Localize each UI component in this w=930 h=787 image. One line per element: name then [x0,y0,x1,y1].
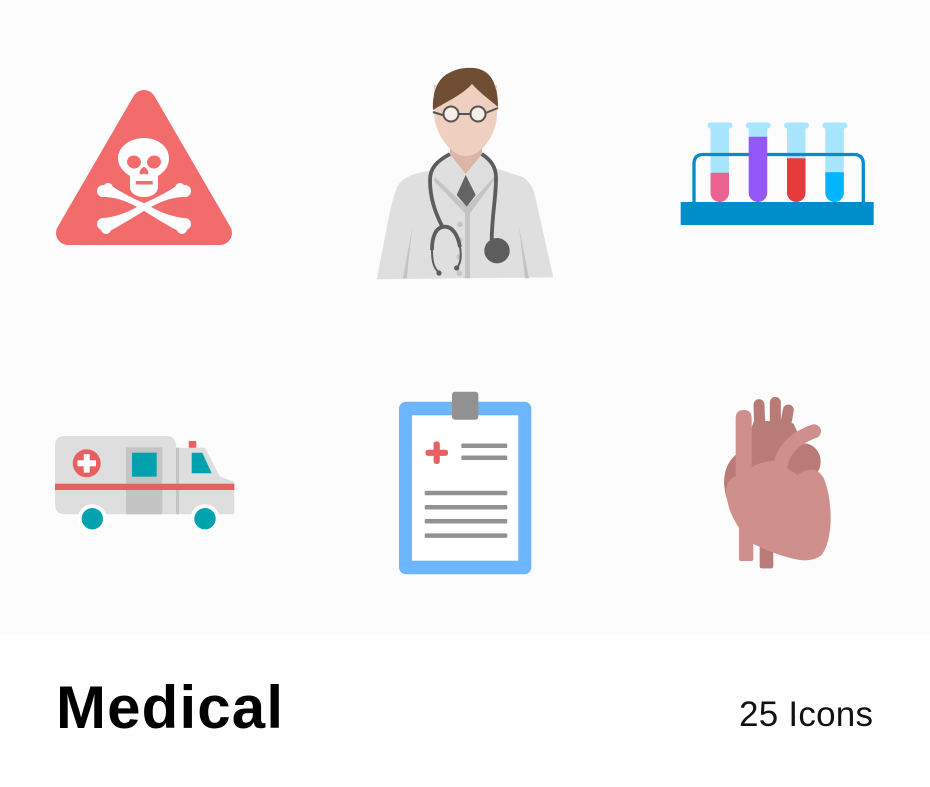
lab coat [377,154,553,279]
aortic arch [781,431,814,465]
box body [55,436,176,514]
icon count label: 25 Icons [739,695,873,734]
back vessels and atria [724,402,821,568]
tube liquids [710,173,729,202]
front vessels [736,410,753,561]
red cross badge [73,449,101,477]
crossbones [97,183,191,234]
tube glass [708,122,847,202]
icon: poison warning triangle with skull and crossbones [68,102,220,234]
icon: test tubes in a rack [681,122,874,225]
cab [176,448,234,514]
icon: ambulance [55,436,234,533]
heart body [726,461,831,560]
wheels [78,504,220,533]
face [434,85,497,156]
glasses [433,106,498,122]
coat buttons [456,222,463,276]
neck [450,148,482,174]
icon: medical clipboard [399,392,531,574]
rack frame [694,154,863,204]
skull [118,138,169,197]
hair [433,68,498,110]
title: Medical [56,674,283,741]
rack base [681,202,874,225]
icon: doctor with stethoscope [377,68,553,279]
red cross [426,442,448,464]
tie [457,175,476,207]
stethoscope [430,154,510,276]
text lines [425,444,507,538]
icon: anatomical heart [724,402,831,568]
